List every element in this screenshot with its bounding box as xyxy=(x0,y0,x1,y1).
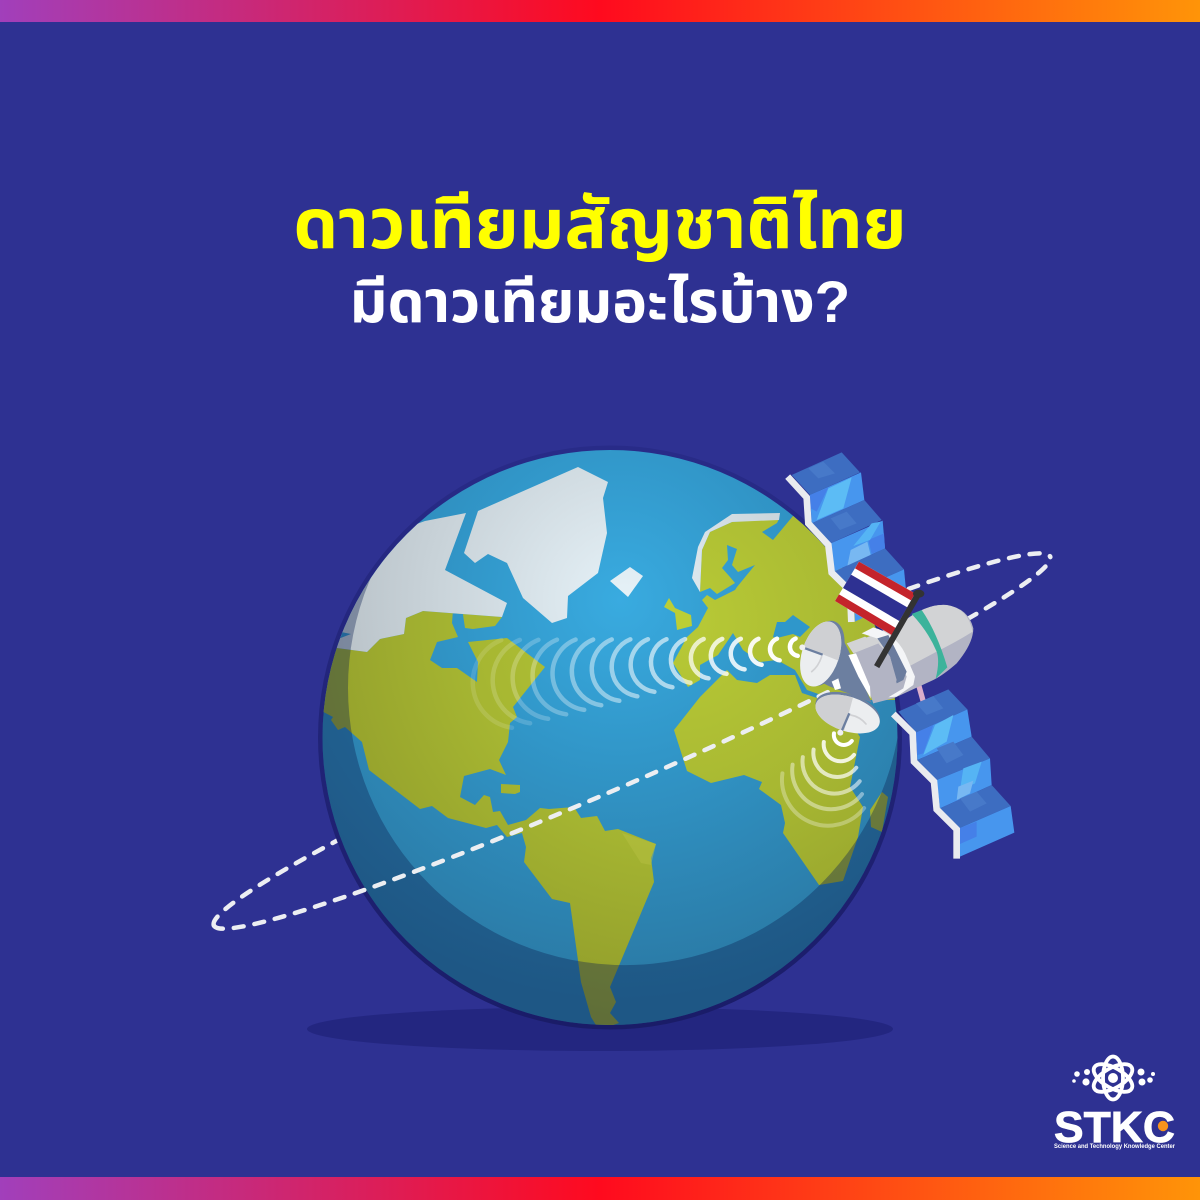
logo tagline: Science and Technology Knowledge Center xyxy=(1054,1143,1175,1150)
globe xyxy=(318,446,902,1030)
landmass: North and South America xyxy=(300,608,656,1030)
landmass: Africa xyxy=(674,670,863,885)
satellite access panel xyxy=(877,635,907,683)
landmass: Cuba xyxy=(501,784,520,794)
dish mount xyxy=(810,633,872,703)
upper dish xyxy=(799,620,845,686)
satellite collar xyxy=(862,627,915,697)
landmass: Eurasia xyxy=(673,516,895,700)
landmass: Iceland xyxy=(610,567,643,597)
logo: STKC xyxy=(1054,1056,1175,1152)
landmass: Arctic Canada xyxy=(336,513,507,652)
landmass: United Kingdom xyxy=(664,598,692,630)
upper solar panel xyxy=(788,452,907,622)
icon: atom xyxy=(1072,1056,1155,1100)
logo wordmark: STKC xyxy=(1054,1103,1175,1152)
title: ดาวเทียมสัญชาติไทย xyxy=(293,184,907,263)
orbit back edge xyxy=(199,522,1050,925)
signal waves from upper dish xyxy=(468,639,798,732)
orbit front edge xyxy=(214,557,1065,960)
subtitle: มีดาวเทียมอะไรบ้าง? xyxy=(350,270,850,335)
satellite rear capsule xyxy=(853,605,973,703)
landmass: Black Sea xyxy=(773,615,810,638)
lower solar panel xyxy=(893,689,1014,859)
globe edge shading xyxy=(322,578,898,1025)
landmass: Greenland xyxy=(464,467,608,623)
globe ground shadow xyxy=(307,1007,893,1051)
logo orange dot xyxy=(1158,1121,1168,1131)
top gradient bar xyxy=(0,0,1200,22)
landmass: Arctic sea sliver xyxy=(340,632,351,638)
icon: Thai flag xyxy=(835,562,924,667)
lower solar panel connector xyxy=(919,685,923,702)
bottom gradient bar xyxy=(0,1177,1200,1200)
satellite xyxy=(788,452,1014,859)
landmass: Madagascar xyxy=(870,792,888,832)
landmass: South America highlight xyxy=(622,833,656,865)
satellite front cylinder xyxy=(847,637,897,703)
signal waves from lower dish xyxy=(769,733,864,839)
landmass: Scandinavian ice xyxy=(692,513,780,592)
lower dish xyxy=(816,692,880,736)
